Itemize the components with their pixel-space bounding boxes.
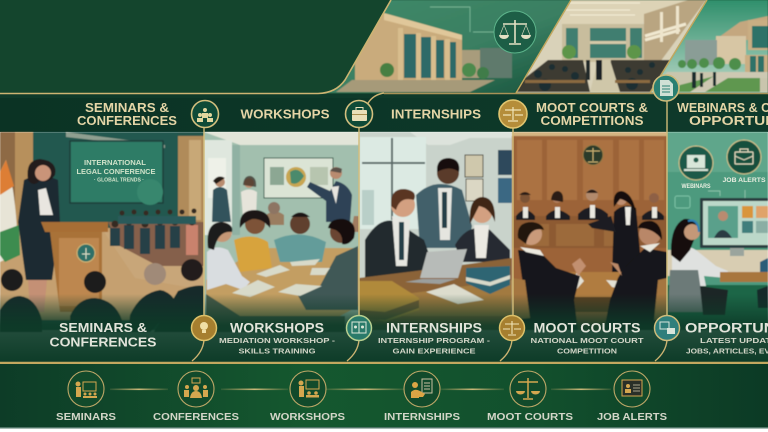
icon: moot courts scales — [510, 371, 546, 407]
label: job alerts: JOB ALERTS — [597, 412, 667, 423]
monitor — [700, 198, 768, 256]
table — [359, 258, 512, 330]
label: webinars: WEBINARS — [682, 184, 710, 190]
dark green corner — [0, 0, 391, 93]
panel: header band — [0, 94, 768, 132]
header: workshops: WORKSHOPS — [240, 108, 330, 122]
caption: moot courts: COMPETITION — [557, 346, 617, 356]
court emblem — [583, 145, 603, 165]
caption: internships — [378, 320, 491, 356]
conference screen text: INTERNATIONAL — [84, 158, 146, 167]
icon: job alerts — [614, 371, 650, 407]
image: law school building — [320, 0, 572, 93]
image: campus building right — [650, 0, 768, 93]
speaker — [18, 159, 60, 312]
label: seminars: SEMINARS — [56, 412, 116, 423]
icon: conferences — [178, 371, 214, 407]
panel: top banner — [0, 0, 768, 96]
image: campus hall with students — [516, 0, 707, 93]
papers and books — [426, 284, 484, 304]
caption: seminars and conferences: CONFERENCES — [50, 334, 157, 350]
icon: scales in circle — [494, 11, 536, 53]
label: workshops: WORKSHOPS — [270, 412, 345, 423]
workshop participants — [207, 210, 358, 310]
judges bench — [516, 189, 664, 220]
panel: workshops scene — [204, 132, 359, 332]
panel: internships scene — [359, 132, 512, 330]
standing advocate — [588, 191, 642, 274]
conference screen text: LEGAL CONFERENCE — [76, 167, 156, 176]
scene caption fade — [0, 294, 768, 364]
header: seminars and conferences — [77, 101, 177, 128]
job alerts icon — [727, 140, 761, 174]
header: seminars and conferences: SEMINARS & — [85, 101, 169, 115]
header: seminars and conferences: CONFERENCES — [77, 114, 177, 128]
caption: moot courts: NATIONAL MOOT COURT — [530, 336, 644, 345]
header: moot courts and competitions — [536, 101, 648, 128]
conference screen text: · GLOBAL TRENDS · — [94, 178, 144, 184]
panel: bottom icon strip — [0, 364, 768, 428]
papers — [232, 259, 330, 297]
caption: opportunities: LATEST UPDATES — [700, 336, 768, 345]
caption: seminars and conferences: SEMINARS & — [59, 320, 147, 335]
label: internships: INTERNSHIPS — [384, 412, 460, 423]
binders — [359, 281, 419, 322]
caption: opportunities — [685, 320, 768, 356]
label: conferences: CONFERENCES — [153, 412, 239, 423]
icon: scales badge — [500, 316, 524, 340]
speech bubble — [675, 196, 690, 208]
panel: moot courts scene — [512, 132, 667, 330]
front row audience — [0, 259, 204, 332]
presenter — [307, 167, 352, 222]
caption: workshops — [219, 320, 336, 356]
panel: seminars and conferences scene — [0, 132, 204, 332]
table — [206, 248, 359, 316]
caption: seminars and conferences — [50, 320, 157, 350]
caption: moot courts — [530, 320, 644, 356]
audience rows — [108, 208, 204, 266]
standing attendees — [212, 176, 359, 232]
label: moot courts: MOOT COURTS — [487, 412, 573, 423]
label: job alerts: JOB ALERTS — [722, 178, 766, 184]
caption: internships: INTERNSHIP PROGRAM - — [378, 336, 491, 345]
icon: internships header badge — [499, 100, 527, 128]
webinars icon — [679, 146, 713, 180]
icon: workshops — [290, 371, 326, 407]
seated intern left — [365, 189, 434, 278]
icon: document badge — [653, 75, 679, 101]
connector lines — [110, 388, 611, 390]
podium — [41, 222, 108, 312]
standing mentor — [416, 158, 472, 248]
flag — [0, 160, 20, 262]
caption: moot courts: MOOT COURTS — [534, 320, 640, 336]
laptop — [420, 249, 467, 278]
counsel table — [552, 272, 665, 310]
icon: seminars header badge — [192, 100, 218, 128]
caption: internships: GAIN EXPERIENCE — [392, 346, 476, 356]
left and right advocates — [512, 221, 667, 330]
conference screen text — [76, 158, 156, 184]
icon: classroom badge — [346, 316, 372, 340]
caption: internships: INTERNSHIPS — [386, 320, 482, 336]
woman at desk — [668, 219, 728, 315]
caption: workshops: MEDIATION WORKSHOP - — [219, 336, 336, 345]
icon: online badge — [654, 316, 680, 340]
header: webinars and career opportunities — [677, 101, 768, 128]
seated intern right — [455, 197, 510, 262]
caption: workshops: SKILLS TRAINING — [238, 346, 316, 356]
icon: seminars — [68, 371, 104, 407]
icon: internships — [404, 371, 440, 407]
icon: workshops header badge — [346, 100, 372, 128]
icon: lightbulb badge — [192, 316, 216, 340]
presentation screen — [264, 158, 333, 198]
header: moot courts and competitions: COMPETITIONS — [540, 114, 644, 128]
header: internships: INTERNSHIPS — [391, 108, 481, 122]
caption: workshops: WORKSHOPS — [230, 320, 324, 336]
panel: webinars and opportunities scene — [667, 132, 768, 330]
header: moot courts and competitions: MOOT COURTS & — [536, 101, 648, 115]
